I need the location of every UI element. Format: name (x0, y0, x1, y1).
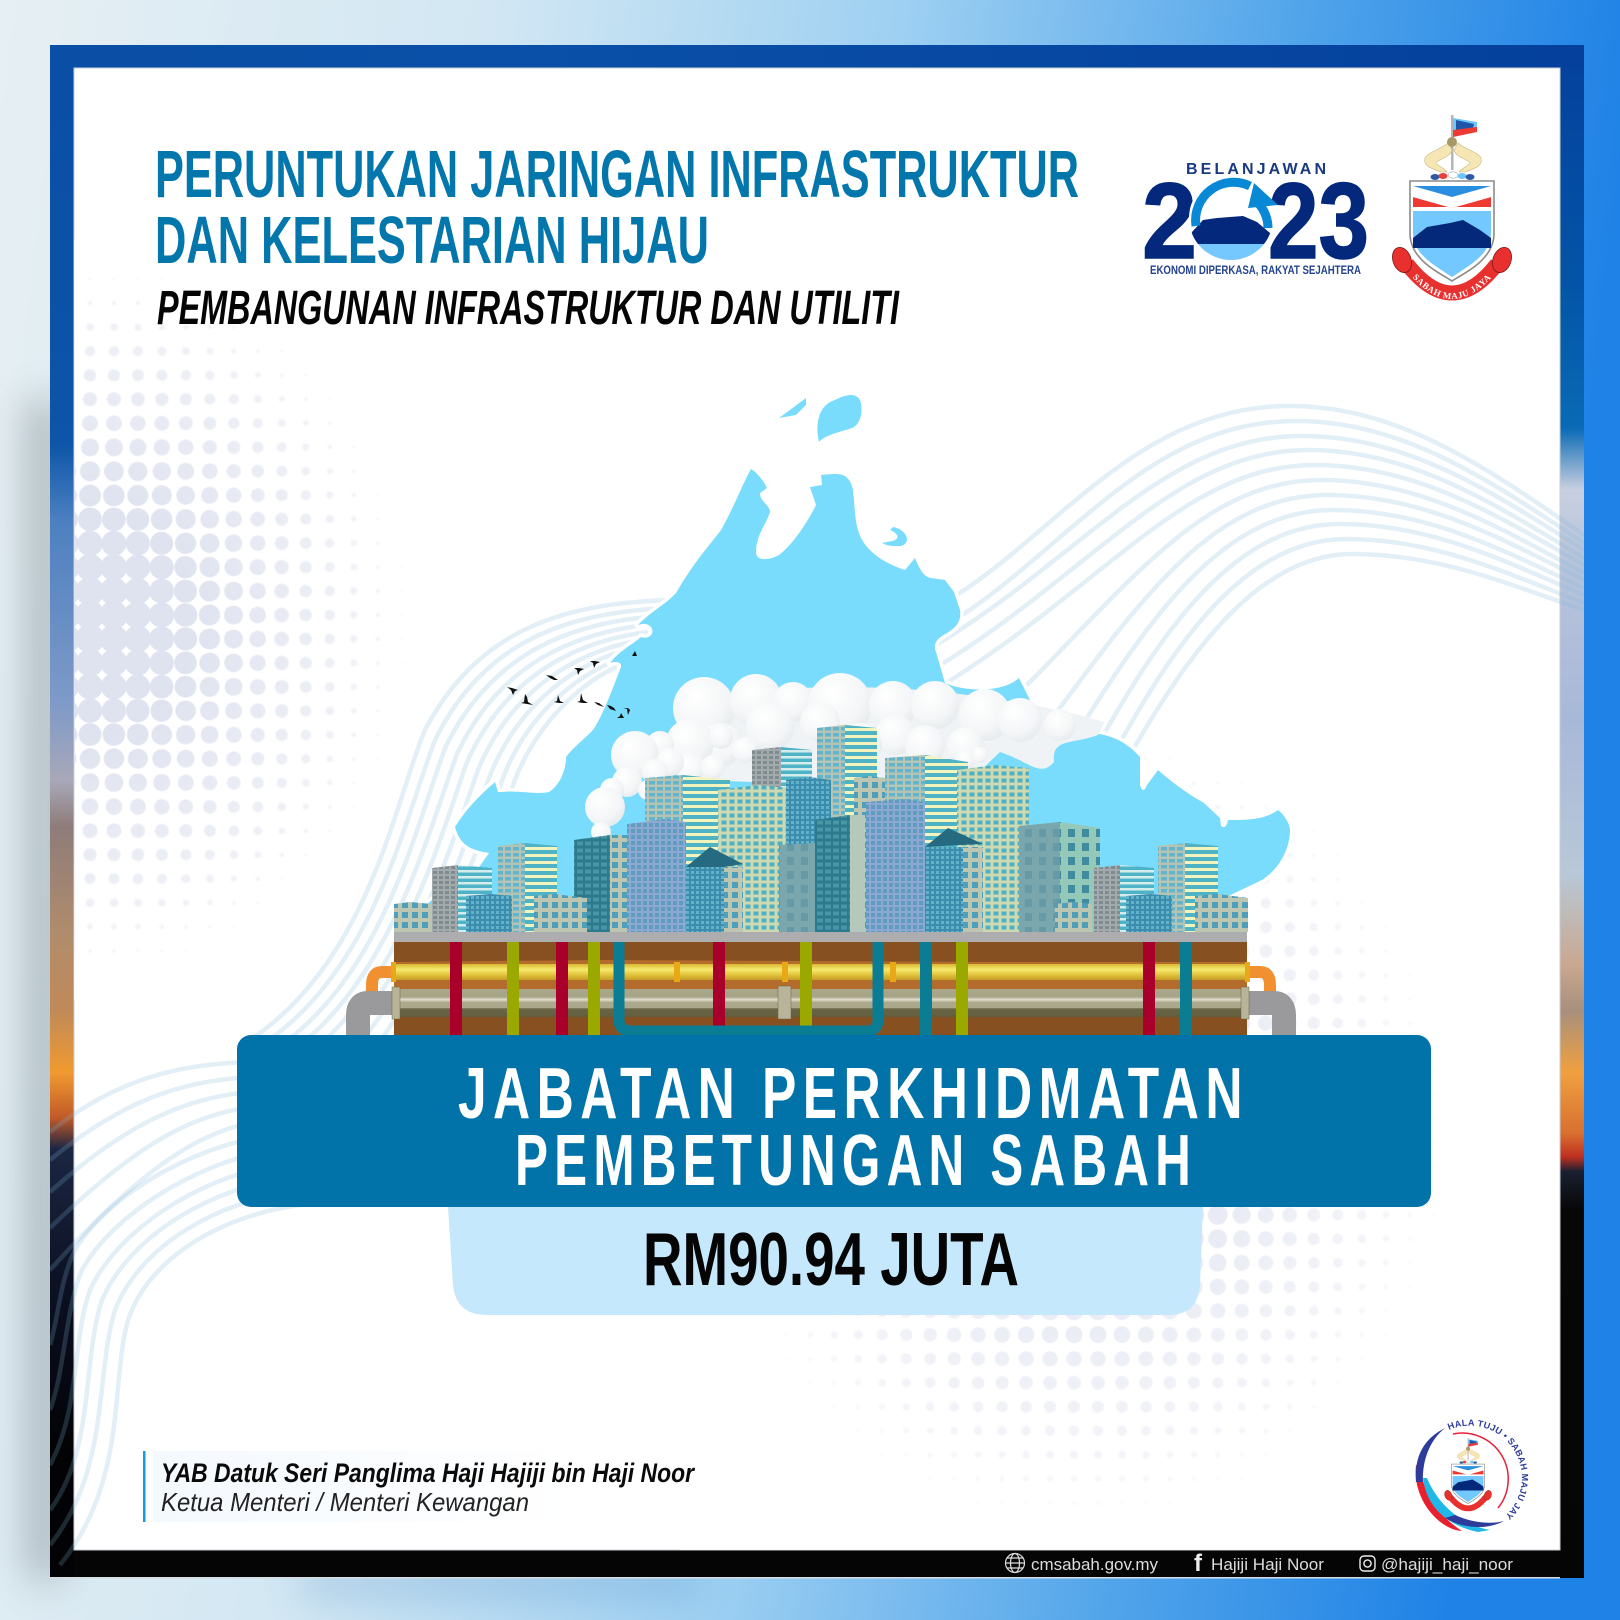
subtitle: PEMBANGUNAN INFRASTRUKTUR DAN UTILITI (157, 282, 900, 335)
city skyline (394, 725, 1248, 932)
title (155, 137, 1079, 278)
logo: Belanjawan 2023: 2 (1142, 160, 1197, 281)
agency banner: PEMBETUNGAN SABAH (515, 1121, 1197, 1201)
footer social links: @hajiji_haji_noor (1381, 1555, 1513, 1574)
elbow pipes (358, 972, 1284, 1036)
halftone dots: lower right (680, 783, 1480, 1550)
flock of birds (507, 651, 637, 718)
halftone dots: left (74, 240, 380, 1000)
agency banner: JABATAN PERKHIDMATAN (458, 1054, 1249, 1134)
smoke clouds (585, 673, 1105, 842)
wave lines: right (936, 406, 1584, 755)
funding pill (448, 1207, 1203, 1315)
agency banner (237, 1035, 1431, 1207)
chief minister credit (143, 1451, 695, 1522)
logo: Sabah coat of arms (1392, 115, 1512, 300)
icon: instagram (1360, 1556, 1375, 1571)
title: DAN KELESTARIAN HIJAU (155, 203, 709, 278)
icon: globe (1006, 1554, 1024, 1572)
logo: Belanjawan 2023: BELANJAWAN (1186, 161, 1326, 178)
logo: Sabah coat of arms: SABAH MAJU JAYA (1412, 274, 1492, 300)
chief minister credit: YAB Datuk Seri Panglima Haji Hajiji bin Haji Noor (161, 1458, 695, 1488)
amount: RM90.94 JUTA (643, 1217, 1019, 1301)
logo: Hala Tuju Sabah Maju Jaya: HALA TUJU • SABAH MAJU JAYA (1447, 1420, 1528, 1520)
footer social links (1006, 1550, 1513, 1577)
chief minister credit: Ketua Menteri / Menteri Kewangan (161, 1487, 529, 1517)
logo: Belanjawan 2023: 23 (1268, 160, 1369, 281)
wave lines: centre left (250, 600, 672, 1040)
icon: facebook: f (1194, 1550, 1203, 1577)
title: PERUNTUKAN JARINGAN INFRASTRUKTUR (155, 137, 1079, 212)
logo: Belanjawan 2023 (1142, 160, 1369, 281)
underground pipes (358, 932, 1284, 1036)
footer social links: Hajiji Haji Noor (1211, 1555, 1324, 1574)
footer social links: cmsabah.gov.my (1031, 1555, 1158, 1574)
wave lines: bottom left (50, 1062, 300, 1565)
logo: Belanjawan 2023: EKONOMI DIPERKASA, RAKYAT SEJAHTERA (1150, 265, 1361, 277)
map of Sabah (400, 395, 1290, 925)
